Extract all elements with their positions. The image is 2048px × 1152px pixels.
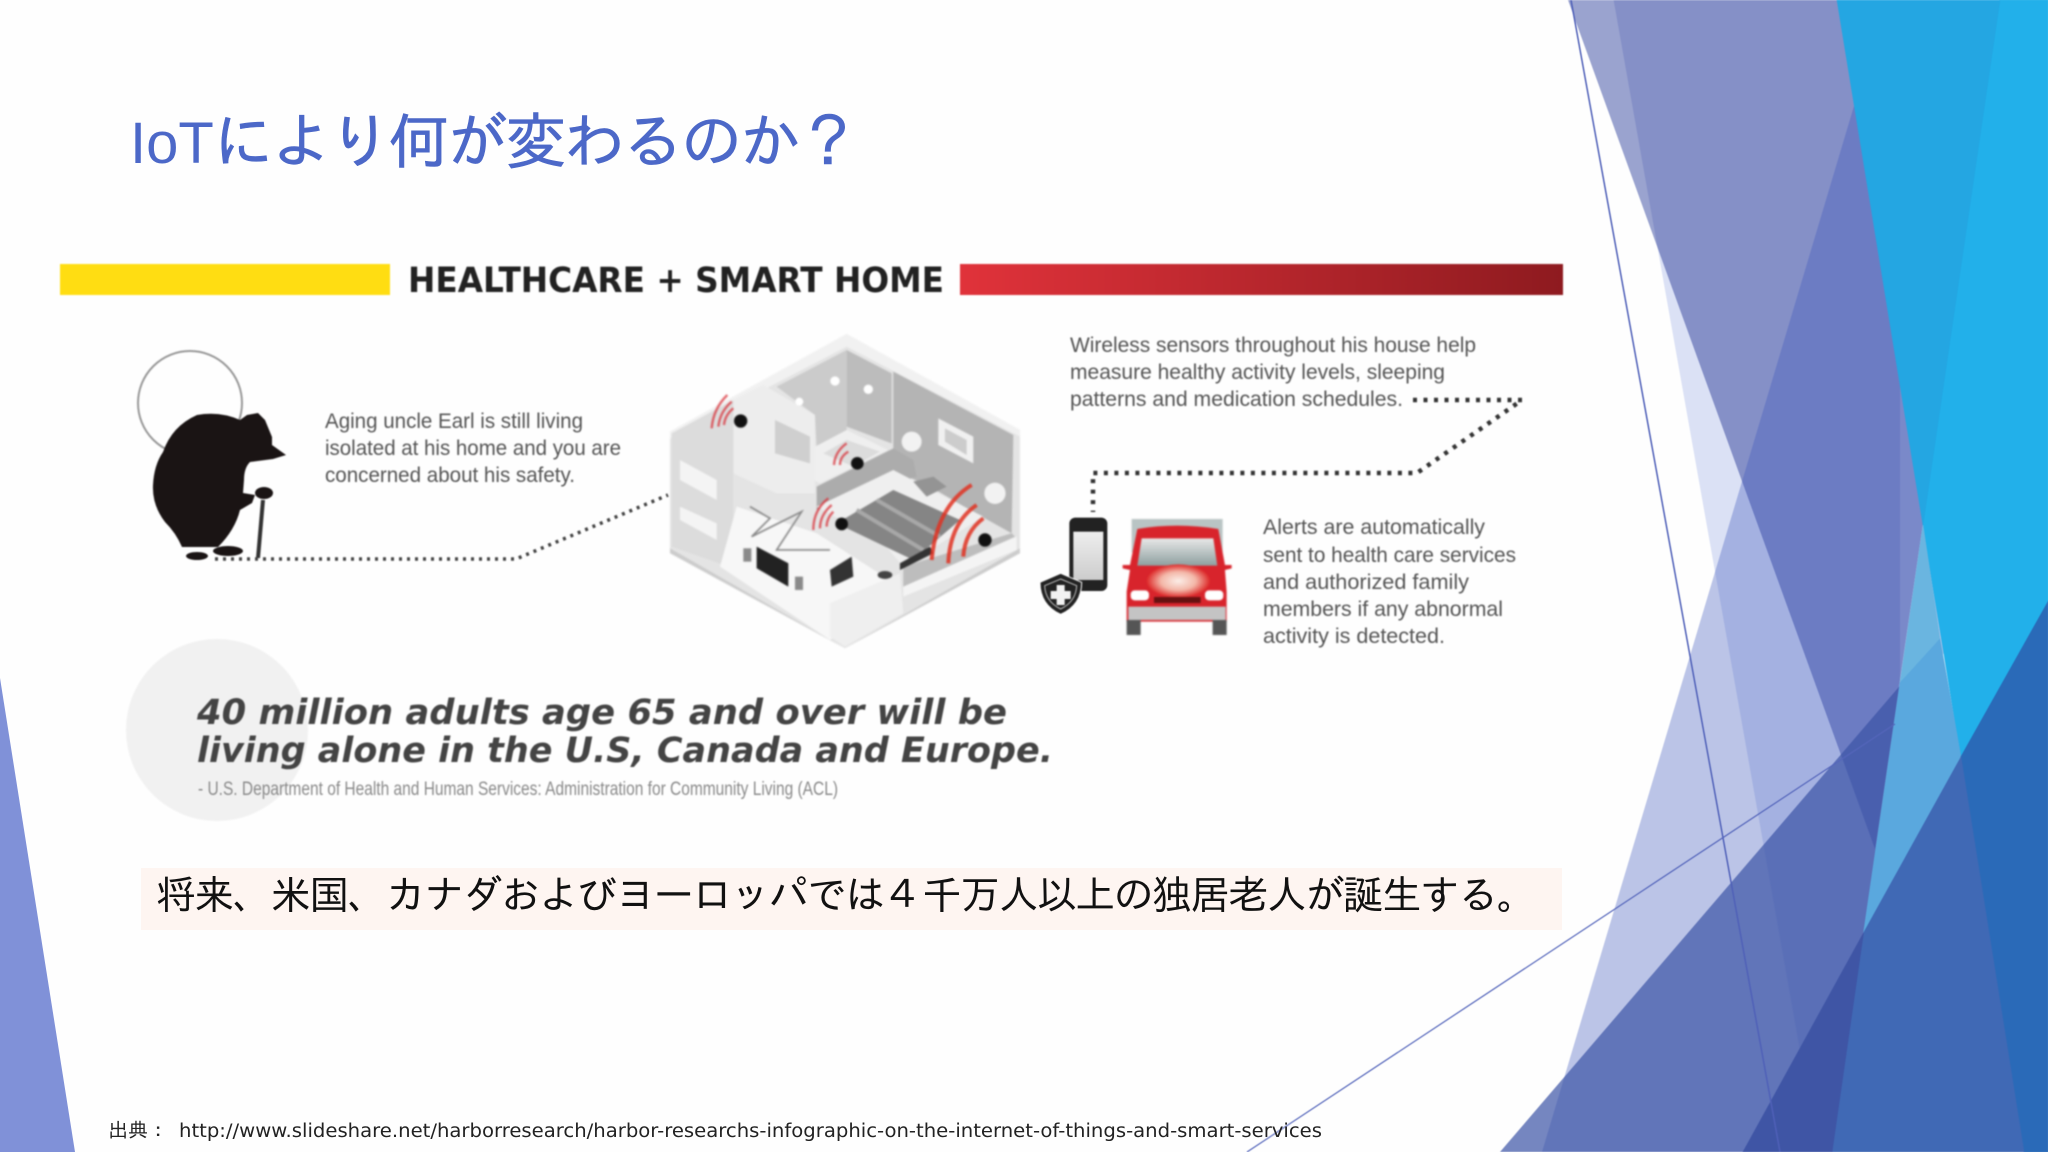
header bar: yellow — [60, 264, 390, 295]
dotted connector: sensors to alerts — [1093, 400, 1522, 512]
statistic text: living alone in the U.S, Canada and Europe. — [197, 731, 1053, 771]
icon: red car front view — [1123, 519, 1232, 635]
text: alerts: Alerts are automatically — [1263, 516, 1485, 539]
text: aging uncle Earl: concerned about his safety. — [325, 464, 575, 487]
text: aging uncle Earl: isolated at his home and you are — [325, 437, 621, 460]
heading: HEALTHCARE + SMART HOME — [408, 261, 944, 301]
background facets: right decoration — [1247, 0, 2048, 1152]
text: wireless sensors: patterns and medication schedules. — [1070, 388, 1403, 411]
title: IoTにより何が変わるのか？ — [130, 110, 856, 176]
source citation: http://www.slideshare.net/harborresearch/harbor-researchs-infographic-on-the-internet-of-things-and-smart-services — [179, 1121, 1322, 1142]
illustration: isometric smart home with sensors — [670, 334, 1020, 648]
infographic panel: healthcare + smart home — [60, 261, 1563, 821]
text: alerts — [1263, 516, 1516, 648]
dotted connector: man to house — [215, 495, 668, 559]
header bar: red — [960, 264, 1563, 295]
wireless arcs — [712, 395, 848, 530]
text: wireless sensors: measure healthy activity levels, sleeping — [1070, 361, 1445, 384]
text: aging uncle Earl — [325, 410, 621, 487]
text: alerts: and authorized family — [1263, 571, 1470, 594]
icon: elderly man silhouette with cane — [153, 413, 286, 560]
caption band — [141, 868, 1562, 930]
statistic text — [196, 693, 1053, 771]
background facet: left decoration — [0, 678, 75, 1152]
text: wireless sensors — [1070, 334, 1476, 411]
text: alerts: members if any abnormal — [1263, 598, 1503, 621]
source citation: 出典： — [108, 1120, 168, 1140]
caption text: 将来、米国、カナダおよびヨーロッパでは４千万人以上の独居老人が誕生する。 — [156, 874, 1535, 914]
decorative gray circle behind statistic — [126, 639, 308, 821]
text: wireless sensors: Wireless sensors throughout his house help — [1070, 334, 1476, 357]
text: alerts: activity is detected. — [1263, 625, 1445, 648]
text: aging uncle Earl: Aging uncle Earl is still living — [325, 410, 583, 433]
statistic text: 40 million adults age 65 and over will be — [196, 693, 1007, 733]
sensors — [734, 414, 992, 547]
icon: thought circle — [138, 351, 242, 455]
text: alerts: sent to health care services — [1263, 544, 1516, 567]
icon: smartphone with medical shield — [1040, 518, 1107, 614]
source line: - U.S. Department of Health and Human Services: Administration for Community Living (ACL) — [198, 779, 838, 800]
